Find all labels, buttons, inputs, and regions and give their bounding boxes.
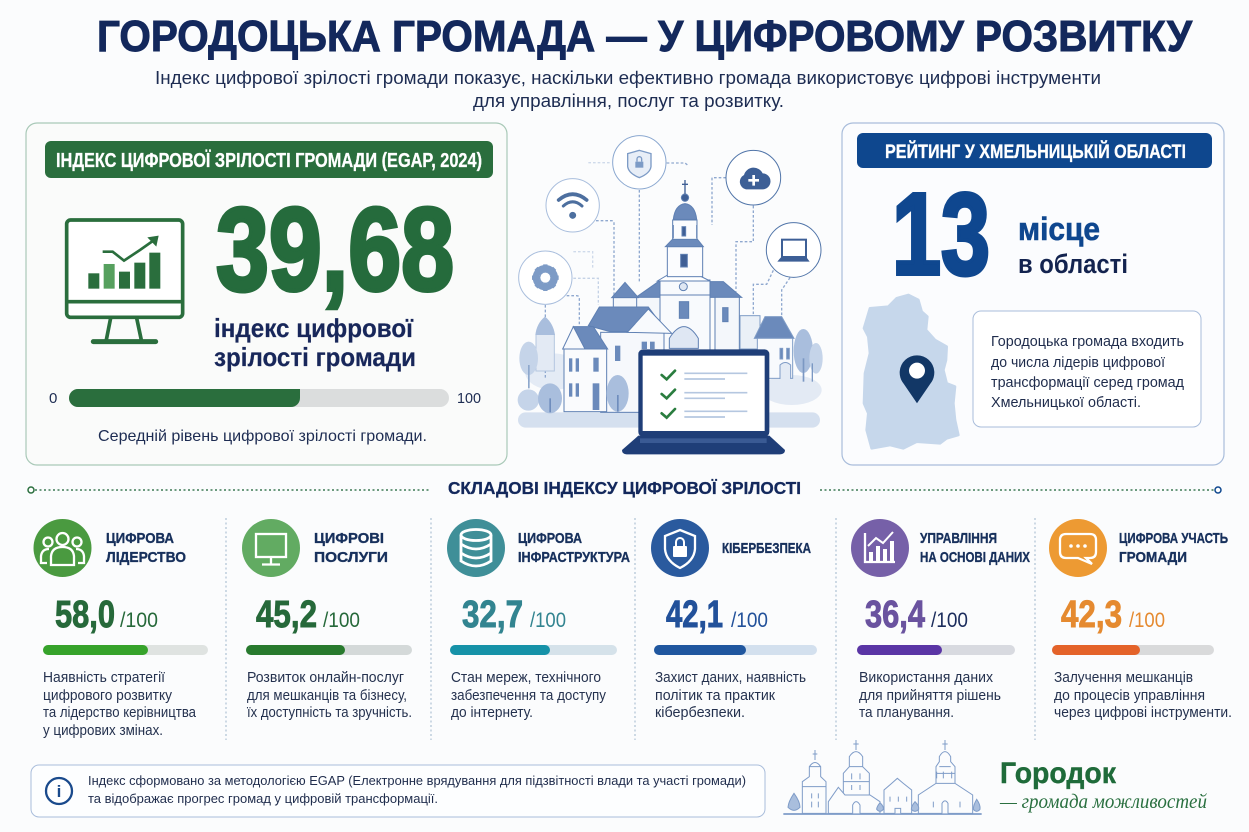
score: 42,3 [1061,594,1122,636]
description: до інтернету. [451,705,533,721]
score bar [654,645,817,655]
score: /100 [931,609,968,632]
progress bar 39.68 [49,389,481,407]
description: їх доступність та зручність. [246,705,412,721]
component: cybersecurity [651,519,817,721]
description: цифрового розвитку [43,688,173,704]
icon: cloud plus [740,168,770,189]
description: у цифрових змінах. [43,723,163,739]
right houses [740,316,794,379]
heading: ЛІДЕРСТВО [106,549,186,566]
section heading: components: СКЛАДОВІ ІНДЕКСУ ЦИФРОВОЇ ЗРІЛОСТІ [448,478,801,498]
big number 13: 13 [892,169,990,299]
connected icons [519,136,821,304]
score: 45,2 [256,594,317,636]
background tower [535,317,555,371]
left houses [563,307,672,412]
subtitle: Індекс цифрової зрілості громади показує, наскільки ефективно громада використовує цифрові інструменти [155,68,1101,88]
main church [612,180,742,352]
component: digital services [242,519,412,721]
ground [518,412,820,428]
icon: info [46,778,72,804]
score: 42,1 [666,594,723,636]
panel: regional rating [842,123,1224,465]
icon: info: i [57,782,61,801]
heading: УПРАВЛІННЯ [920,530,997,547]
laptop with checklist [622,349,785,454]
section heading: components [28,478,1221,498]
description [451,670,607,721]
info callout: трансформації серед громад [991,375,1185,391]
description: Наявність стратегії [43,670,165,686]
label: index of digital maturity [214,313,416,372]
description: та планування. [859,705,954,721]
label: index of digital maturity: індекс цифрової [214,313,414,343]
foreground tree [607,375,629,412]
connector lines [545,163,790,378]
icon: gear [532,264,559,291]
info callout: до числа лідерів цифрової [991,355,1165,371]
description: забезпечення та доступу [451,688,607,704]
description: для мешканців та бізнесу, [247,688,407,704]
score: 32,7 [462,594,523,636]
heading: НА ОСНОВІ ДАНИХ [920,549,1030,566]
trees [518,329,823,413]
description: Залучення мешканців [1054,670,1193,686]
description: кібербезпеки. [655,705,745,721]
description: до процесів управління [1054,688,1205,704]
icon: shield [651,519,709,577]
description [246,670,412,721]
heading [518,530,630,566]
heading [1119,530,1228,566]
icon: monitor [242,519,300,577]
component: digital community participation [1049,519,1232,721]
label: index of digital maturity: зрілості громади [214,342,416,372]
score: 58,0 [55,594,115,636]
icon: monitor with growth chart [67,220,183,342]
heading [106,530,186,566]
panel heading: rating: РЕЙТИНГ У ХМЕЛЬНИЦЬКІЙ ОБЛАСТІ [885,141,1186,163]
icon: data chart [851,519,909,577]
big number 39,68: 39,68 [216,184,454,316]
panel heading: index [45,141,493,178]
description [1054,670,1232,721]
component: data-driven management [851,519,1030,721]
heading: ГРОМАДИ [1119,549,1187,566]
description [859,670,1001,721]
score bar [43,645,208,655]
score: /100 [530,609,566,632]
icon: wifi [559,194,587,217]
score bar [450,645,617,655]
panel heading: index: ІНДЕКС ЦИФРОВОЇ ЗРІЛОСТІ ГРОМАДИ (EGAP, 2024) [56,149,482,172]
description: Стан мереж, технічного [451,670,601,686]
description: та лідерство керівництва [43,705,197,721]
info callout: Городоцька громада входить [991,334,1184,350]
description: для прийняття рішень [859,688,1001,704]
heading: КІБЕРБЕЗПЕКА [722,540,811,557]
heading: ЦИФРОВА [518,530,582,547]
score: /100 [323,609,360,632]
panel: digital maturity index [26,123,507,465]
heading [920,530,1030,566]
description: Використання даних [859,670,994,686]
subtitle [155,68,1101,111]
map of Khmelnytskyi oblast [864,295,958,448]
description: через цифрові інструменти. [1054,705,1232,721]
footer note [31,765,765,817]
panel heading: rating [857,133,1212,168]
icon: shield lock [628,150,651,178]
heading: ЦИФРОВІ [314,530,384,547]
info callout: Хмельницької області. [991,395,1141,411]
logo: wordmark: — громада можливостей [999,791,1207,813]
heading [314,530,388,566]
icon: laptop [777,240,810,262]
score bar [246,645,412,655]
score: /100 [1129,609,1165,632]
progress bar 39.68: 100 [457,390,481,407]
logo: wordmark: Городок [1000,757,1117,790]
icon: speech bubble [1049,519,1107,577]
caption: Середній рівень цифрової зрілості громади. [98,428,427,445]
label: place: місце [1018,211,1100,247]
description [43,670,197,739]
heading: ІНФРАСТРУКТУРА [518,549,630,566]
label: in the oblast: в області [1018,249,1128,279]
description: Розвиток онлайн-послуг [247,670,404,686]
footer note: Індекс сформовано за методологією EGAP (Електронне врядування для підзвітності влади та участі громади) [88,773,746,788]
icon: database [447,519,505,577]
info callout [973,311,1201,427]
icon: location pin [900,355,934,403]
progress bar 39.68: 0 [49,390,57,407]
description: Захист даних, наявність [655,670,806,686]
score: /100 [731,609,768,632]
score bar [1052,645,1214,655]
score: /100 [120,609,158,632]
score: 36,4 [865,594,925,636]
heading: ЦИФРОВА [106,530,174,547]
component: digital leadership [34,519,208,739]
component: digital infrastructure [447,519,630,721]
icon: people [34,519,92,577]
footer note: та відображає прогрес громад у цифровій трансформації. [88,791,438,806]
description [655,670,806,721]
heading: ПОСЛУГИ [314,549,388,566]
description: політик та практик [655,688,776,704]
logo: wordmark [999,757,1207,813]
logo: town line drawing [783,740,982,814]
illustration: digital town [518,136,823,454]
score bar [857,645,1015,655]
subtitle: для управління, послуг та розвитку. [473,91,784,111]
